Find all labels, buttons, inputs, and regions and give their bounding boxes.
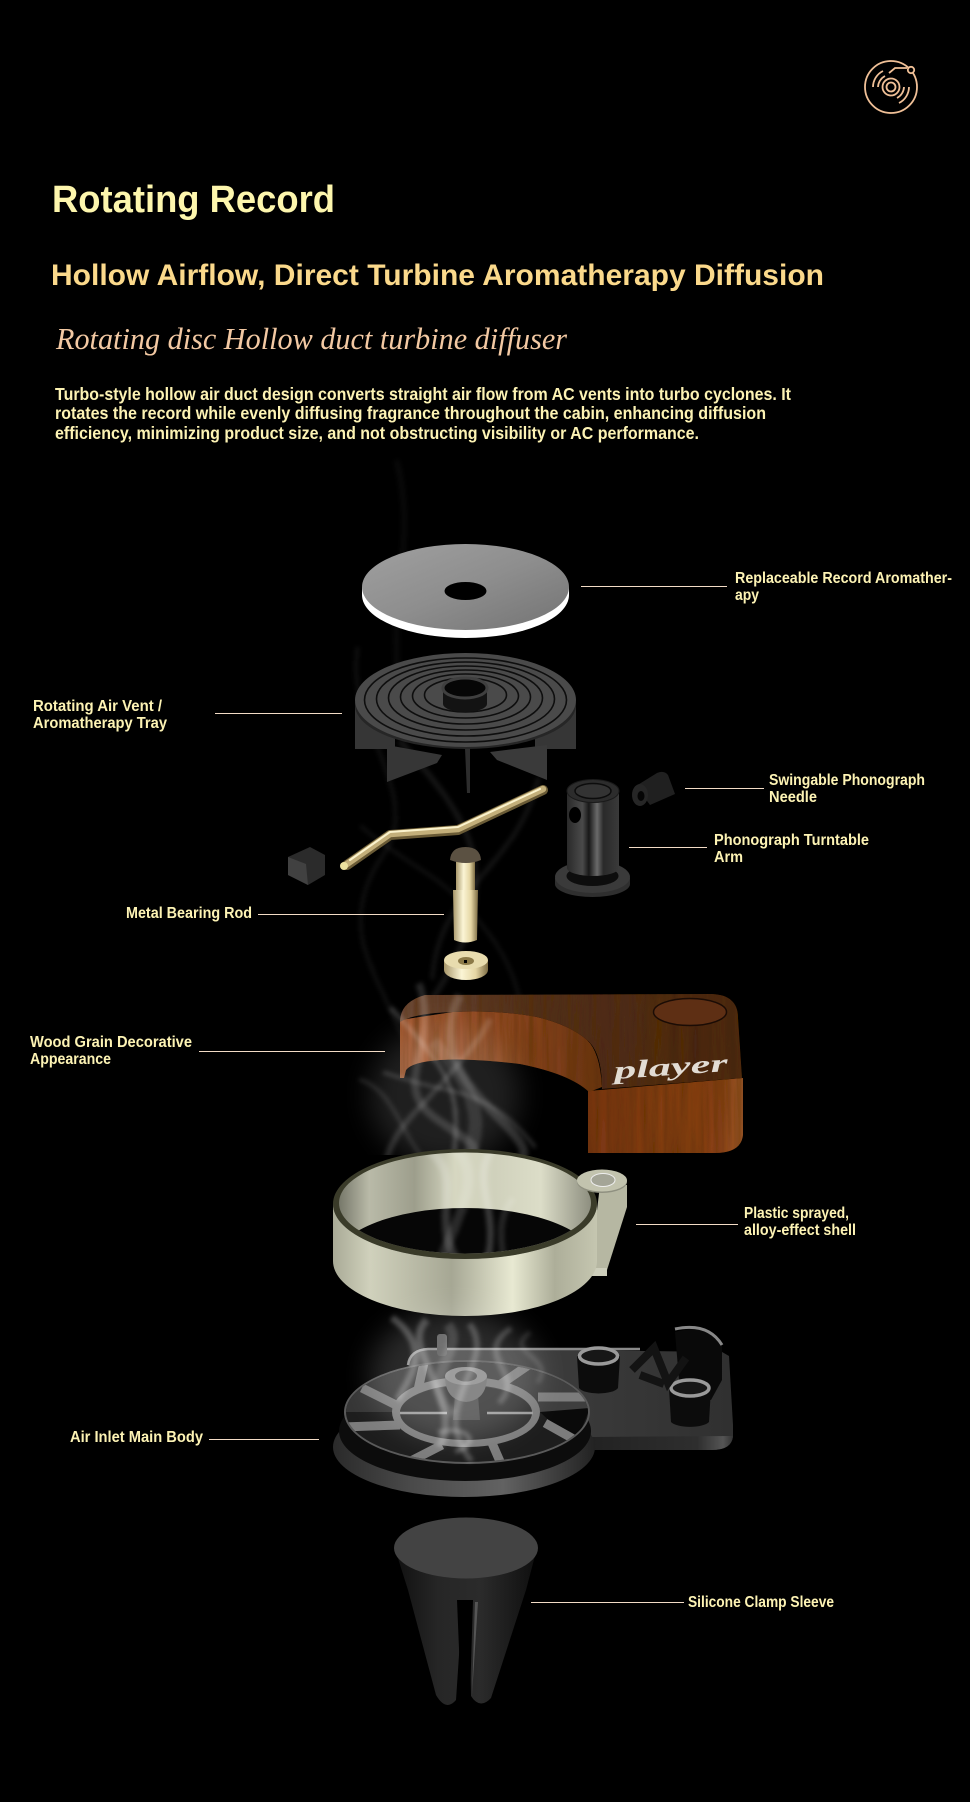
part: phonograph needle [632,772,675,806]
label: turntable arm: Phonograph Turntable [714,832,869,849]
label: alloy shell: Plastic sprayed, [744,1205,849,1222]
inlet posts [577,1356,620,1393]
label: rotating air vent [33,698,342,732]
inlet pin [437,1334,447,1356]
icon: vinyl record [865,61,917,113]
label: wood grain [30,1034,385,1068]
label: alloy shell [636,1205,856,1239]
inlet clip bracket [632,1348,686,1384]
label: rotating air vent: Rotating Air Vent / [33,698,163,715]
label: rotating air vent: Aromatherapy Tray [33,715,167,732]
body text: efficiency, minimizing product size, and not obstructing visibility or AC performance. [55,423,699,443]
part: gold tonearm [340,789,543,870]
label: turntable arm [629,832,869,866]
label: alloy shell: alloy-effect shell [744,1222,856,1239]
title: Rotating Record [52,179,335,221]
label: wood grain: Wood Grain Decorative [30,1034,192,1051]
italic tagline: Rotating disc Hollow duct turbine diffuser [55,321,568,356]
label: replaceable record [581,570,952,604]
inlet back arc [675,1329,722,1400]
part: metal bearing rod [450,847,481,942]
label: air inlet: Air Inlet Main Body [70,1429,203,1446]
label: replaceable record: apy [735,587,759,604]
label: swingable needle: Swingable Phonograph [769,772,925,789]
smoke over inlet [370,1310,544,1460]
label: metal bearing rod: Metal Bearing Rod [126,905,252,922]
label: swingable needle [685,772,925,806]
part: black cube [288,847,325,885]
part: rotating air vent tray [355,653,576,793]
subtitle: Hollow Airflow, Direct Turbine Aromatherapy Diffusion [51,259,824,292]
body text: rotates the record while evenly diffusing fragrance throughout the cabin, enhancing diffusion [55,403,766,423]
part: replaceable record disc [362,544,569,638]
smoke: faint upper wisps [355,460,540,1060]
label: turntable arm: Arm [714,849,743,866]
part: silicone clamp sleeve [394,1518,538,1705]
body text: Turbo-style hollow air duct design converts straight air flow from AC vents into turbo cyclones. It [55,384,791,404]
smoke: over wood and below it [360,985,530,1180]
body text [55,384,791,443]
label: silicone clamp: Silicone Clamp Sleeve [688,1594,834,1611]
label: swingable needle: Needle [769,789,817,806]
label: wood grain: Appearance [30,1051,111,1068]
part: gold ring [444,951,488,980]
label: replaceable record: Replaceable Record Aromather- [735,570,952,587]
part: air inlet main body [333,1327,733,1497]
part: wood grain shell [400,994,743,1153]
part: alloy shell ring [333,1149,627,1316]
wood label: player: player [609,1050,729,1085]
part: turntable arm post [555,780,630,897]
lug cap [577,1170,627,1193]
